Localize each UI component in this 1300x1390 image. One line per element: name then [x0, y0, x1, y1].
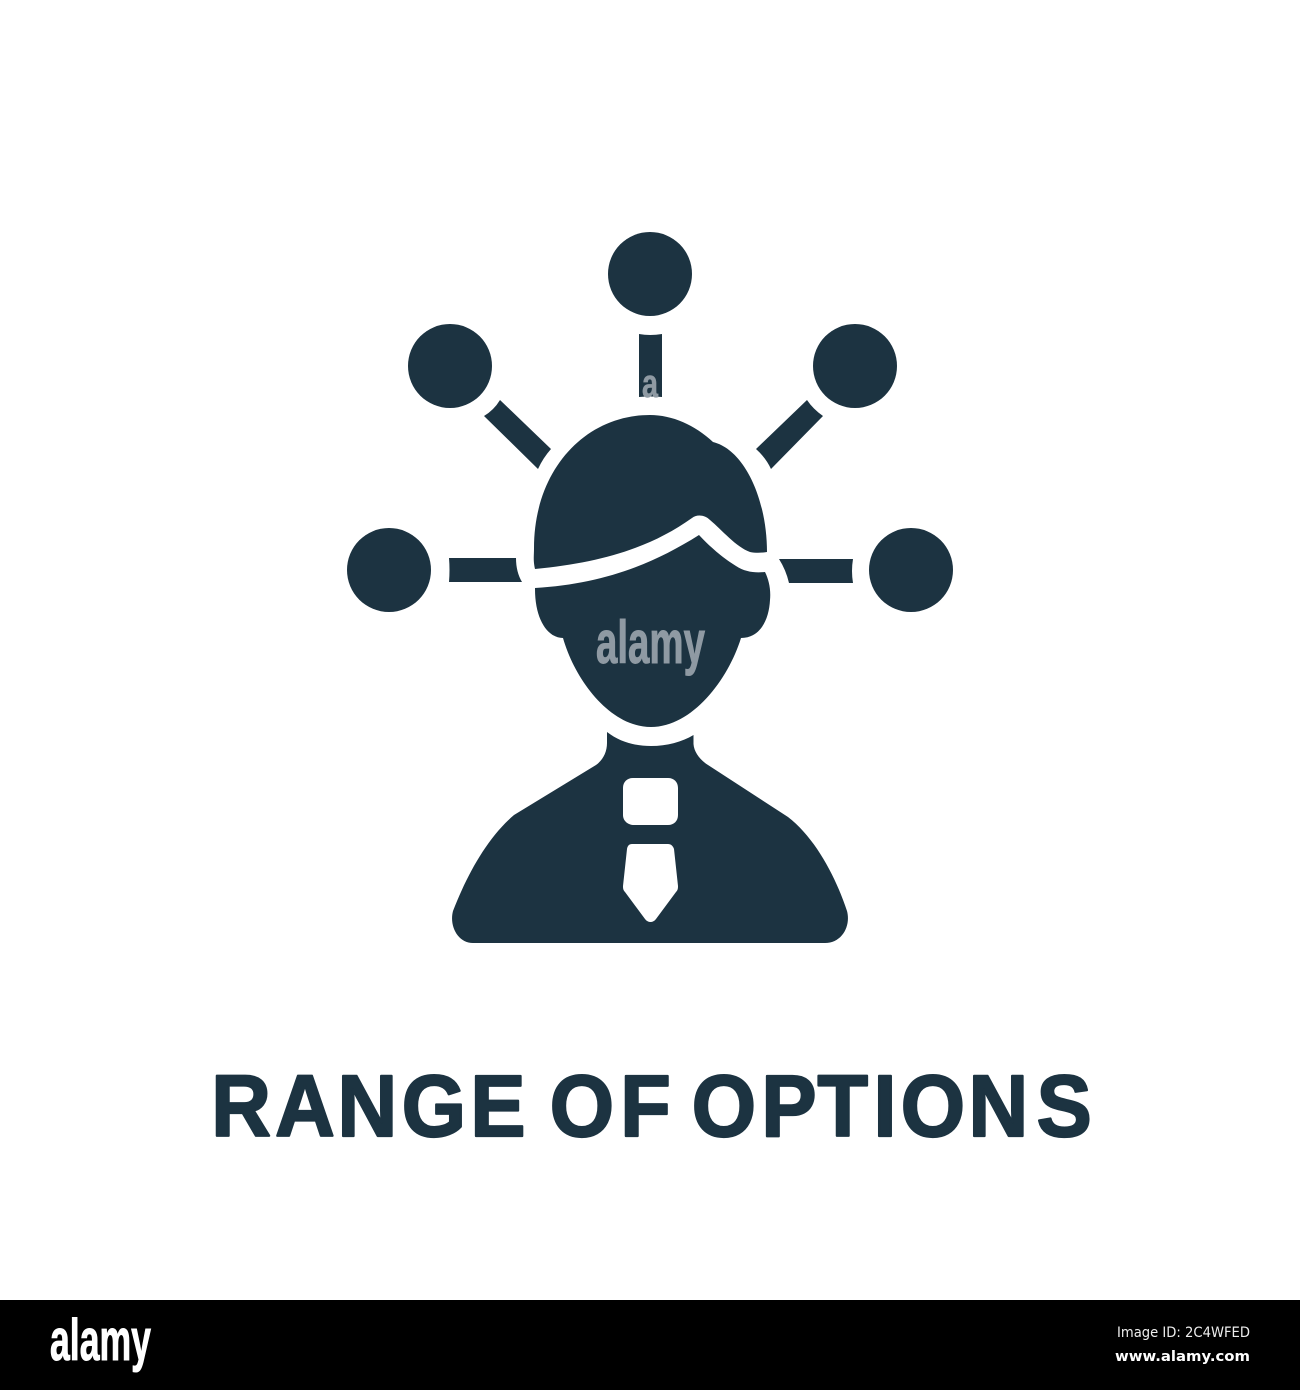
icon: face — [535, 535, 770, 727]
icon: upper left option node — [408, 324, 551, 469]
image id: Image ID: 2C4WFED — [1117, 1325, 1250, 1341]
footer bar — [0, 1300, 1300, 1390]
icon: top option node — [608, 232, 692, 397]
website: www.alamy.com — [1115, 1349, 1250, 1365]
icon: left option node — [347, 528, 522, 612]
icon: right option node — [779, 528, 953, 612]
title: RANGE OF OPTIONS — [211, 1057, 1092, 1154]
icon: hair — [534, 415, 767, 569]
icon: upper right option node — [756, 324, 897, 469]
icon: person with range of options — [347, 232, 953, 943]
watermark: letter on top connector: a — [642, 362, 659, 406]
footer logo: alamy — [50, 1308, 151, 1373]
watermark: alamy on face: alamy — [596, 609, 705, 676]
icon: shoulders with tie — [452, 732, 848, 943]
